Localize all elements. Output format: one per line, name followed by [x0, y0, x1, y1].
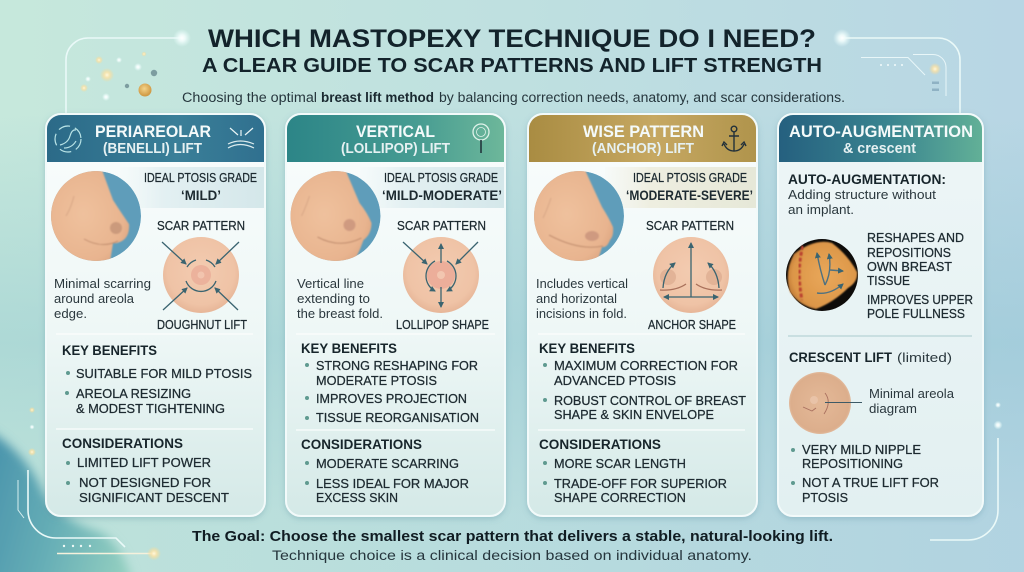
label: anchor shape: ANCHOR SHAPE — [648, 318, 736, 332]
considerations: LIMITED LIFT POWER — [77, 456, 211, 470]
considerations: SHAPE CORRECTION — [554, 491, 686, 505]
subtitle: breast lift method — [321, 90, 434, 105]
bullets: crescent: REPOSITIONING — [802, 457, 903, 471]
bullets: crescent — [791, 443, 939, 505]
key benefits: SUITABLE FOR MILD PTOSIS — [76, 367, 252, 381]
caption: minimal areola diagram: diagram — [869, 401, 917, 416]
grade band: IDEAL PTOSIS GRADE — [144, 171, 257, 185]
text: tissue effects: OWN BREAST — [867, 260, 952, 274]
considerations: LESS IDEAL FOR MAJOR — [316, 477, 469, 491]
subtitle: Choosing the optimal — [182, 90, 317, 105]
icon: circular arrows — [55, 126, 81, 152]
label: scar pattern: SCAR PATTERN — [646, 219, 734, 233]
key benefits — [539, 341, 746, 422]
text: tissue effects: POLE FULLNESS — [867, 307, 965, 321]
heading: crescent lift: (limited) — [897, 350, 952, 365]
text: tissue effects: REPOSITIONS — [867, 246, 951, 260]
description text: around areola — [54, 291, 135, 306]
decoration: top right circuit — [833, 29, 960, 114]
decoration: bottom right circuit — [930, 402, 1002, 540]
panel: wise pattern lift — [528, 114, 757, 516]
diagram: minimal areola — [789, 372, 862, 434]
key benefits: MODERATE PTOSIS — [316, 374, 437, 388]
caption: minimal areola diagram: Minimal areola — [869, 386, 955, 401]
footer goal: The Goal: Choose the smallest scar pattern that delivers a stable, natural-looking lift. — [192, 528, 833, 545]
key benefits: KEY BENEFITS — [539, 341, 635, 356]
intro text — [788, 172, 946, 217]
subtitle — [182, 90, 845, 105]
key benefits: SHAPE & SKIN ENVELOPE — [554, 408, 714, 422]
footer goal: Technique choice is a clinical decision based on individual anatomy. — [272, 547, 752, 563]
description text: edge. — [54, 306, 87, 321]
grade band — [605, 167, 756, 208]
title — [202, 25, 822, 77]
considerations — [301, 437, 469, 505]
considerations — [62, 436, 229, 505]
photo: severe ptosis — [534, 171, 624, 261]
photo: mild-moderate ptosis — [290, 171, 380, 261]
description text: Vertical line — [297, 276, 364, 291]
label: doughnut lift: DOUGHNUT LIFT — [157, 318, 247, 332]
grade band: ‘MODERATE-SEVERE’ — [626, 187, 753, 203]
description text: Minimal scarring — [54, 276, 151, 291]
label: lollipop shape: LOLLIPOP SHAPE — [396, 318, 489, 332]
subtitle: by balancing correction needs, anatomy, and scar considerations. — [439, 90, 845, 105]
diagram: lollipop scar — [403, 237, 479, 313]
bullets: crescent: VERY MILD NIPPLE — [802, 443, 921, 457]
considerations: NOT DESIGNED FOR — [79, 476, 211, 490]
heading: crescent lift: CRESCENT LIFT — [789, 350, 893, 365]
grade band: IDEAL PTOSIS GRADE — [633, 171, 747, 185]
decoration: bottom left circuit — [18, 407, 161, 560]
key benefits: KEY BENEFITS — [62, 343, 157, 358]
description text: Includes vertical — [536, 276, 628, 291]
key benefits: & MODEST TIGHTENING — [76, 402, 225, 416]
description text: and horizontal — [536, 291, 617, 306]
considerations: EXCESS SKIN — [316, 491, 398, 505]
panel header: wise pattern — [529, 115, 756, 162]
label: scar pattern: SCAR PATTERN — [397, 219, 486, 233]
considerations: CONSIDERATIONS — [301, 437, 422, 452]
decoration: top left circuit and particles — [66, 29, 191, 114]
considerations — [539, 437, 727, 505]
description text: incisions in fold. — [536, 306, 627, 321]
text: tissue effects: IMPROVES UPPER — [867, 293, 973, 307]
panel header: vertical — [287, 115, 504, 162]
key benefits: ADVANCED PTOSIS — [554, 374, 676, 388]
caption: minimal areola diagram — [869, 386, 955, 416]
description text — [54, 276, 151, 321]
key benefits: AREOLA RESIZING — [76, 387, 191, 401]
title: A CLEAR GUIDE TO SCAR PATTERNS AND LIFT STRENGTH — [202, 55, 822, 77]
panel header: wise pattern: (ANCHOR) LIFT — [592, 141, 694, 157]
key benefits: ROBUST CONTROL OF BREAST — [554, 394, 746, 408]
grade band: ‘MILD-MODERATE’ — [382, 187, 502, 203]
panel: periareolar lift — [46, 114, 265, 516]
panel header: vertical: (LOLLIPOP) LIFT — [341, 141, 450, 157]
intro text: AUTO-AUGMENTATION: — [788, 172, 946, 187]
panel header: auto-augmentation: AUTO-AUGMENTATION — [789, 123, 973, 141]
considerations: SIGNIFICANT DESCENT — [79, 491, 229, 505]
description text — [536, 276, 628, 321]
panel header: wise pattern: WISE PATTERN — [583, 123, 704, 141]
key benefits: KEY BENEFITS — [301, 341, 397, 356]
text: tissue effects — [867, 231, 973, 321]
text: tissue effects: RESHAPES AND — [867, 231, 964, 245]
grade band — [360, 167, 504, 208]
text: tissue effects: TISSUE — [867, 274, 910, 288]
description text: the breast fold. — [297, 306, 383, 321]
panel header: periareolar: (BENELLI) LIFT — [103, 141, 202, 157]
grade band — [120, 167, 264, 208]
icon: anchor — [722, 126, 746, 151]
label: scar pattern: SCAR PATTERN — [157, 219, 245, 233]
photo: mild ptosis — [51, 171, 141, 261]
key benefits: MAXIMUM CORRECTION FOR — [554, 359, 738, 373]
key benefits — [301, 341, 479, 425]
key benefits: TISSUE REORGANISATION — [316, 411, 479, 425]
intro text: Adding structure without — [788, 187, 936, 202]
title: WHICH MASTOPEXY TECHNIQUE DO I NEED? — [208, 25, 816, 53]
bullets: crescent: NOT A TRUE LIFT FOR — [802, 476, 939, 490]
grade band: IDEAL PTOSIS GRADE — [384, 171, 498, 185]
description text — [297, 276, 383, 321]
considerations: MORE SCAR LENGTH — [554, 457, 686, 471]
intro text: an implant. — [788, 202, 854, 217]
considerations: TRADE-OFF FOR SUPERIOR — [554, 477, 727, 491]
panel: auto-augmentation and crescent — [778, 114, 983, 516]
considerations: CONSIDERATIONS — [62, 436, 183, 451]
description text: extending to — [297, 291, 370, 306]
panel header: periareolar — [47, 115, 264, 162]
icon: chevrons — [228, 128, 254, 148]
panel header: vertical: VERTICAL — [356, 123, 435, 141]
grade band: ‘MILD’ — [181, 187, 221, 203]
panel header: auto-augmentation: & crescent — [843, 141, 916, 157]
panel header: auto-augmentation — [779, 115, 982, 162]
panel: vertical lift — [286, 114, 505, 516]
considerations: MODERATE SCARRING — [316, 457, 459, 471]
footer goal — [192, 528, 833, 563]
bullets: crescent: PTOSIS — [802, 491, 848, 505]
diagram: doughnut scar — [162, 237, 239, 313]
key benefits: STRONG RESHAPING FOR — [316, 359, 478, 373]
diagram: anchor scar — [653, 237, 729, 313]
heading: crescent lift — [789, 350, 952, 365]
key benefits — [62, 343, 252, 416]
image: breast tissue — [786, 239, 858, 311]
key benefits: IMPROVES PROJECTION — [316, 392, 467, 406]
panel header: periareolar: PERIAREOLAR — [95, 123, 211, 141]
icon: lollipop — [473, 124, 489, 153]
considerations: CONSIDERATIONS — [539, 437, 661, 452]
